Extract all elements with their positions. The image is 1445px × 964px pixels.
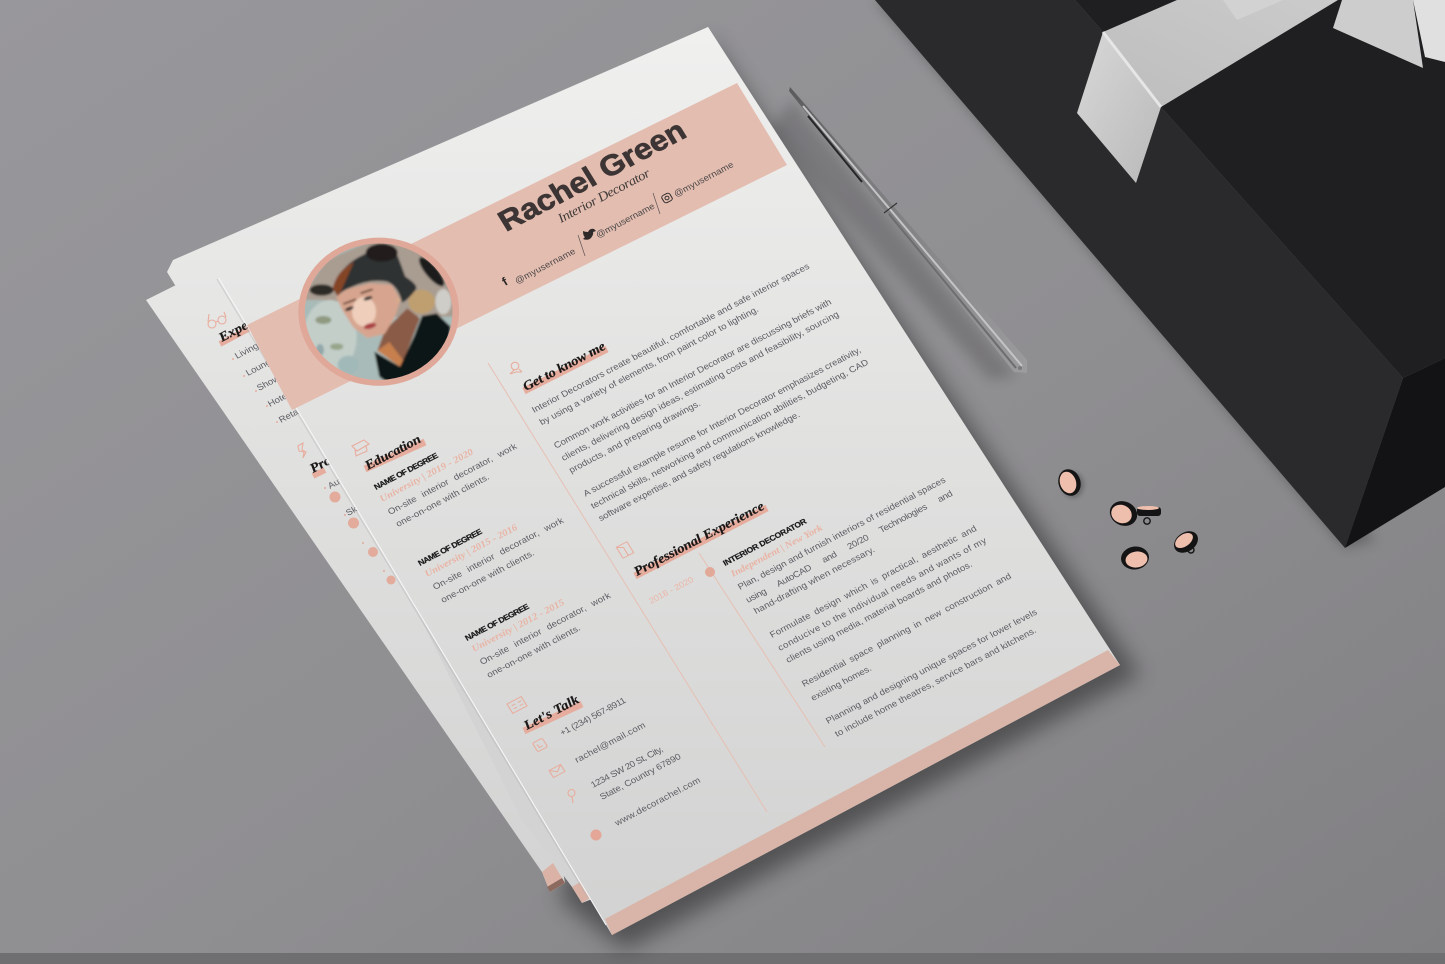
icon: map pin [568,790,575,803]
role: INTERIOR DECORATOR [721,517,808,568]
icon: instagram [661,192,673,204]
duty 3: Residential space planning in new construction and [800,571,1013,689]
degree entry 1: NAME OF DEGREE [372,451,440,492]
duty 2: conducive to the individual needs and wants of my [776,535,988,653]
bottom edge strip [0,953,1445,964]
dates: 2018 - 2020 [647,575,695,606]
heading: skills: Proficiency [307,432,376,476]
degree entry 1: one-on-one with clients. [394,472,491,529]
paragraph 2: products, and preparing drawings. [567,398,702,475]
icon: globe [590,830,602,840]
duty 1: hand-drafting when necessary. [752,545,876,616]
duty 1: Plan, design and furnish interiors of residential spaces [736,475,948,592]
paragraph 2: Common work activities for an Interior Decorator are discussing briefs with [552,297,833,450]
facebook handle: @myusername [513,246,577,286]
duty 4: Planning and designing unique spaces for lower levels [824,607,1039,726]
box side face [875,0,1403,548]
expertise list: Living Room [233,328,285,361]
duty 2: Formulate design which is practical, aesthetic and [768,524,978,640]
degree entry 1: University | 2019 - 2020 [378,447,476,504]
icon: door [616,542,634,558]
bow tail left [1333,0,1423,68]
skills list with timeline dots [324,464,396,584]
duty 3: existing homes. [809,663,873,703]
highlight [524,349,607,391]
expertise list: Showroom [255,363,301,393]
degree entry 3: NAME OF DEGREE [463,602,531,643]
instagram handle: @myusername [672,160,735,199]
section: get to know me [510,261,870,523]
skills list with timeline dots: SketchUp [344,490,386,518]
stack pink edge [542,863,565,892]
website: www.decorachel.com [612,775,702,828]
photo ring [269,211,488,413]
degree entry 2: On-site interior decorator, work [431,515,566,592]
section: professional experience [616,475,1039,747]
header band [247,83,787,410]
page left edge highlight [218,278,606,925]
third sheet under front page [411,600,640,903]
social dividers [578,193,660,256]
expertise heading highlight [220,320,265,344]
paragraph 2: clients, delivering design ideas, estimating costs and feasibility, sourcing [559,309,841,463]
profile photo [298,238,459,386]
back sheet: top of stack [167,27,760,400]
paper stack and resume [146,27,1120,935]
highlight [365,442,425,469]
paragraph 1: Interior Decorators create beautiful, comfortable and safe interior spaces [530,261,811,415]
icon: twitter [583,229,596,240]
heading: expertise: Expertise [216,307,274,346]
paper stack shadow [560,35,1140,950]
stack paper thickness [547,878,565,892]
icon: person [510,362,522,374]
icon: bolt [298,443,306,458]
timeline dot [705,567,715,577]
timeline line [699,553,825,747]
degree entry 2: one-on-one with clients. [439,548,536,605]
degree entry 3: On-site interior decorator, work [478,590,613,667]
portrait [304,244,452,380]
heading: Let's Talk [521,693,582,734]
front sheet edge shadow [217,279,588,898]
name: Rachel Green [492,114,692,238]
box top face [1075,0,1445,378]
heading: Get to know me [520,340,609,394]
button 2 [1106,497,1141,530]
highlight [635,508,767,576]
degree entry 3: University | 2012 - 2015 [470,598,567,654]
button 5 [1170,527,1202,557]
email: rachel@mail.com [573,720,647,765]
paragraph 1: by using a variety of elements, from paint color to lighting. [538,304,760,427]
expertise list: Lounge [244,355,277,378]
duty 2: clients using media, material boards and photos. [784,559,974,665]
section: let's talk [507,693,702,840]
box end face [1345,358,1445,548]
skills list with timeline dots: AutoCAD [326,464,367,491]
degree entry 2: NAME OF DEGREE [416,527,484,568]
bow tail right [1413,0,1445,62]
address: State, Country 67890 [598,752,683,802]
second sheet: expertise page [146,264,565,892]
degree entry 1: On-site interior decorator, work [386,441,519,517]
ribbon top [1103,0,1338,107]
expertise list: Hotel [266,390,291,409]
icon: contact card [507,697,527,713]
job title: Interior Decorator [555,166,654,227]
twitter handle: @myusername [594,201,657,240]
duty 4: to include home theatres, service bars and kitchens. [833,625,1038,739]
pen [770,87,1027,380]
paragraph 3: technical skills, networking and communication abilities, budgeting, CAD [589,357,870,511]
skills heading highlight [313,470,325,476]
heading: Professional Experience [631,500,767,579]
ribbon side [1077,32,1161,183]
third sheet pink edge [572,882,590,903]
main column divider [488,363,767,812]
phone number: +1 (234) 567-8911 [558,696,628,738]
bow flap [1223,0,1283,20]
buttons [1055,466,1202,571]
address: 1234 SW 20 St, City, [589,744,665,790]
social row [499,160,735,288]
ribbon fold highlight [1103,32,1161,107]
footer band [605,650,1120,935]
gift box [875,0,1445,548]
company: Independent | New York [728,523,825,580]
button 4 [1120,545,1150,571]
icon: phone [532,738,548,752]
expertise list [232,328,304,425]
button 3 side view [1137,506,1161,524]
degree entry 3: one-on-one with clients. [485,623,582,680]
page paper [218,27,1120,935]
icon: mail [549,764,565,778]
paragraph 3: software expertise, and safety regulations knowledge. [597,410,802,523]
highlight [524,704,582,731]
duty 1: using AutoCAD and 20/20 Technologies and [744,489,954,605]
icon: facebook: f [499,275,511,288]
button 1 [1055,466,1084,499]
expertise list: Retail [277,405,304,425]
front sheet: resume page [218,27,1120,935]
icon: glasses [208,312,226,328]
section: education [352,433,613,680]
degree entry 2: University | 2015 - 2016 [423,522,521,579]
paragraph 3: A successful example resume for Interior Decorator emphasizes creativity, [581,345,863,498]
icon: graduation cap [352,440,369,456]
heading: Education [362,433,424,474]
